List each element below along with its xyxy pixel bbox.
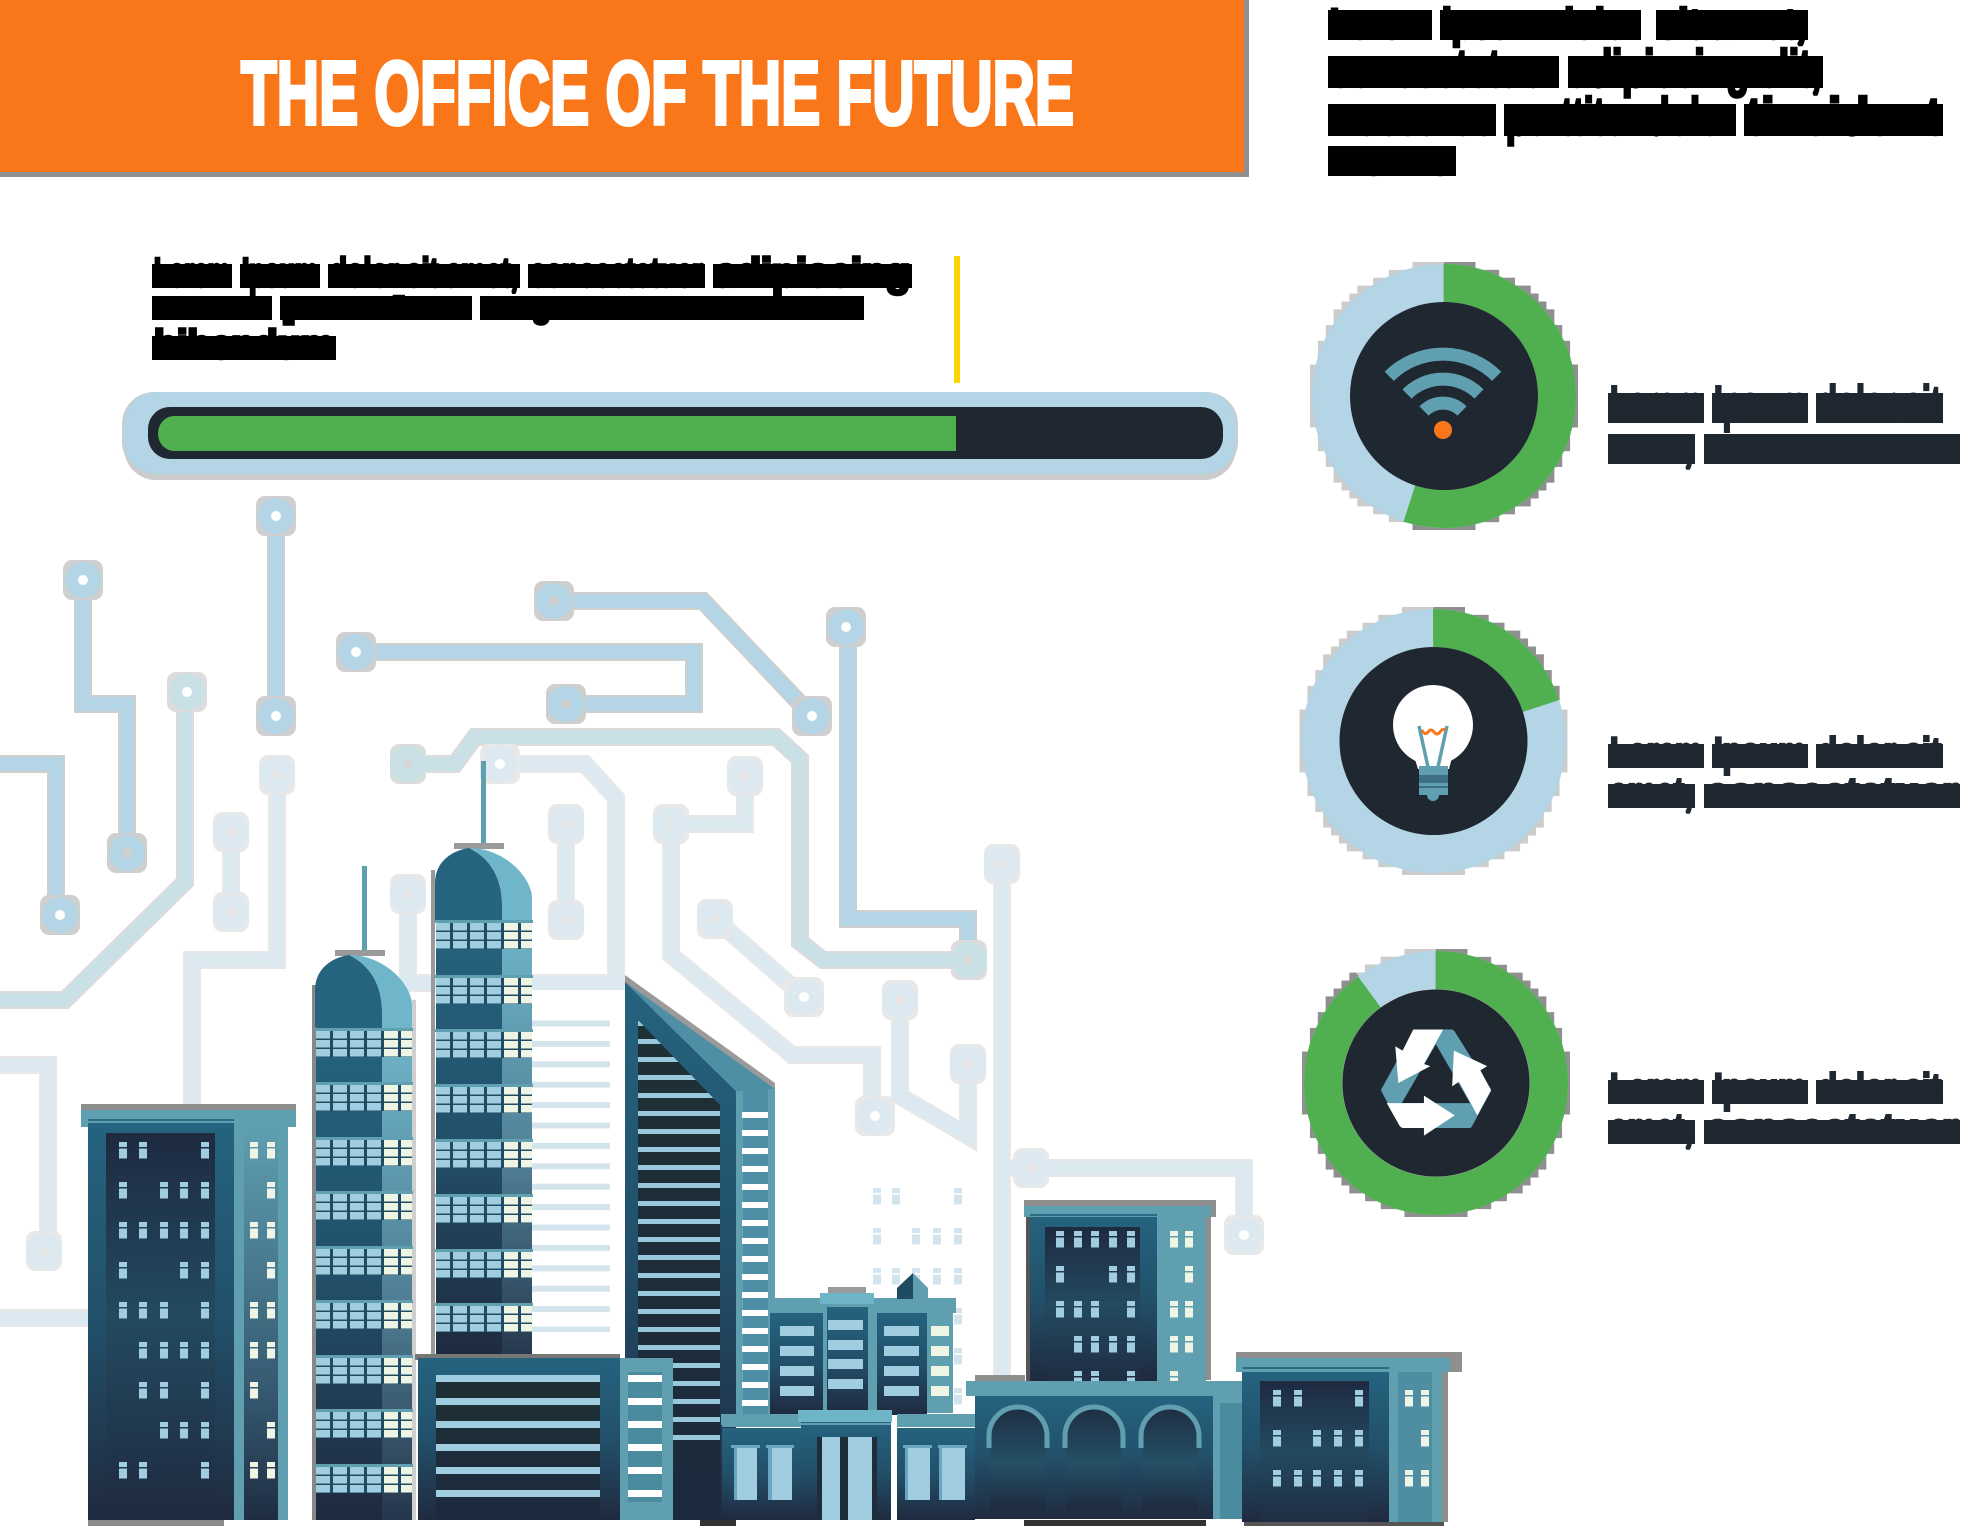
progress text block: porttitor [282, 292, 471, 325]
icon: light bulb [1393, 685, 1473, 801]
building: right block [700, 1352, 1462, 1526]
tower: rear tall [431, 761, 533, 1360]
intro text block [1328, 0, 1943, 183]
intro text block: adipiscing elit, [1570, 40, 1821, 98]
progress text block: consectetuer [530, 251, 703, 295]
stat label: recycle: Lorem [1610, 1065, 1702, 1111]
circuit traces [0, 496, 1264, 1380]
progress text block: dolor sit amet, [330, 251, 518, 295]
progress fill [158, 416, 956, 451]
stat label: bulb: consectetuer [1706, 769, 1958, 815]
stat donut: wifi 55 percent [1310, 262, 1578, 530]
icon: recycle [1384, 1030, 1491, 1136]
arches [989, 1406, 1199, 1510]
progress text block: Ipsum [242, 251, 318, 295]
intro text block: Lorem [1330, 0, 1430, 47]
stat label: recycle [1608, 1065, 1960, 1151]
progress text block [152, 251, 912, 367]
building: slanted tower [625, 975, 775, 1520]
intro text block: nunc [1330, 139, 1454, 183]
title: THE OFFICE OF THE FUTURE [241, 44, 1074, 144]
stat label: bulb: Ipsum [1714, 729, 1806, 775]
intro text block: porttitor dolor [1506, 88, 1734, 146]
stat label: bulb: amet, [1610, 769, 1693, 815]
antenna [362, 866, 367, 956]
stat label: bulb: Lorem [1610, 729, 1702, 775]
intro text block: maecenas [1330, 88, 1494, 146]
ghost white tower [531, 990, 625, 1360]
progress bar [122, 392, 1238, 480]
icon: wifi [1389, 354, 1497, 439]
windows [119, 1142, 275, 1478]
progress text block: adipiscing [715, 251, 910, 295]
progress text block: maecenas [154, 292, 270, 325]
title banner [0, 0, 1249, 177]
progress text block: bibendum [154, 323, 334, 367]
spire [897, 1273, 928, 1299]
stat label: wifi: amet, [1610, 427, 1693, 471]
progress text block: Lorem [154, 251, 230, 295]
building: small cluster back [770, 1273, 956, 1415]
ghost building windows [873, 1188, 962, 1404]
stat label: recycle: amet, [1610, 1105, 1693, 1151]
progress text block: congue massa nunc aenean [482, 292, 862, 325]
intro text block: ipsum dolor [1442, 0, 1639, 47]
tower: front left [312, 866, 416, 1520]
intro text block: sit amet, [1658, 0, 1806, 47]
stat donut: bulb 20 percent [1300, 607, 1567, 875]
intro text block: tincidunt [1746, 88, 1941, 146]
building: base block [415, 1354, 673, 1520]
stat label: recycle: consectetuer [1706, 1105, 1958, 1151]
windows [1273, 1390, 1429, 1486]
stat donut: recycle 90 percent [1302, 949, 1570, 1217]
intro text block: consectetuer [1330, 40, 1557, 98]
stat label: wifi: Lorem [1610, 376, 1702, 432]
windows [1056, 1231, 1193, 1388]
stat label: wifi: consectetuer [1706, 427, 1958, 471]
circuit: pale lines [0, 744, 1264, 1380]
stat label: bulb [1608, 729, 1960, 815]
circuit: blue lines [0, 496, 968, 960]
circuit: mid lines [0, 672, 987, 1000]
antenna [481, 761, 486, 849]
building: left block [81, 1104, 296, 1526]
stat label: wifi: Ipsum [1714, 376, 1806, 432]
building: portico row [721, 1410, 975, 1520]
building: arcade [966, 1375, 1243, 1519]
yellow marker line [954, 256, 960, 383]
stat label: wifi [1608, 376, 1960, 471]
stat label: recycle: Ipsum [1714, 1065, 1806, 1111]
building: rear right tower [1024, 1200, 1216, 1388]
